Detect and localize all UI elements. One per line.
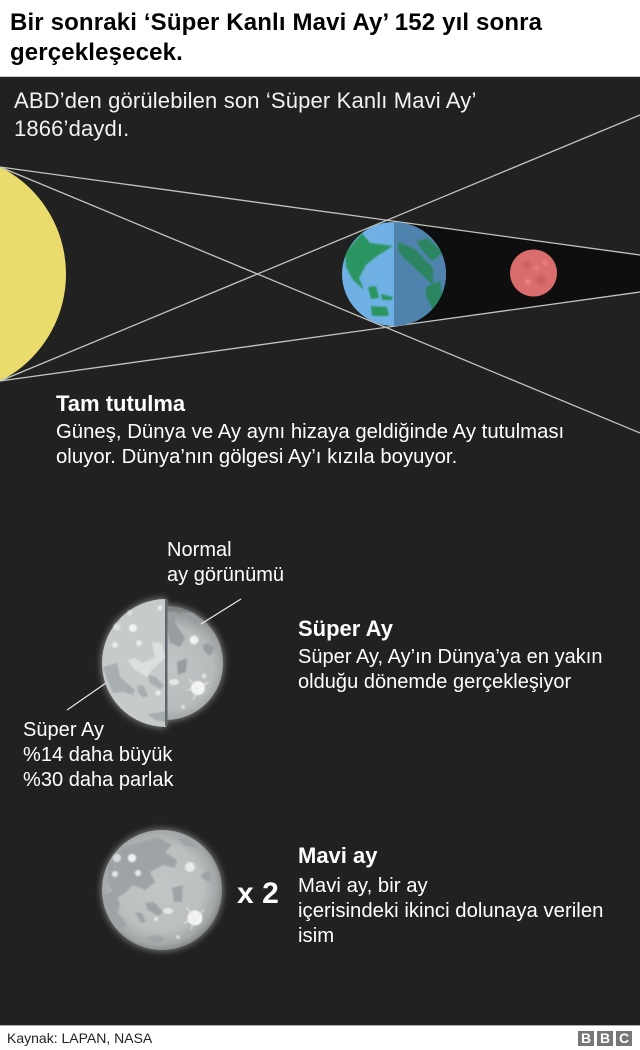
heading: Süper Ay: Süper Ay (298, 616, 393, 641)
text: blue moon description: içerisindeki ikinci dolunaya verilen (298, 900, 603, 922)
header: title: gerçekleşecek. (10, 39, 183, 66)
label: super moon: %30 daha parlak (23, 769, 174, 791)
subtitle (14, 88, 476, 141)
earth shadow (394, 222, 640, 326)
BBC logo: B (581, 1030, 591, 1046)
label: super moon (23, 719, 174, 791)
label: normal moon: Normal (167, 539, 232, 561)
BBC logo: B (600, 1030, 610, 1046)
label: normal moon: ay görünümü (167, 564, 284, 586)
earth (342, 220, 448, 328)
BBC logo (578, 1030, 632, 1046)
text: eclipse description: oluyor. Dünya’nın gölgesi Ay’ı kızıla boyuyor. (56, 446, 457, 468)
sun (0, 154, 66, 394)
subtitle: ABD’den görülebilen son ‘Süper Kanlı Mavi Ay’ (14, 88, 476, 113)
multiplier: x 2 (237, 877, 279, 910)
super moon half (102, 599, 166, 727)
text: super moon description: olduğu dönemde gerçekleşiyor (298, 671, 571, 693)
text: eclipse description: Güneş, Dünya ve Ay aynı hizaya geldiğinde Ay tutulması (56, 421, 564, 443)
text: super moon description: Süper Ay, Ay’ın Dünya’ya en yakın (298, 646, 603, 668)
footer: source (0, 1025, 640, 1050)
label: normal moon (167, 539, 284, 586)
text: super moon description (298, 646, 603, 693)
label: super moon: Süper Ay (23, 719, 104, 741)
pointer lines (67, 599, 241, 710)
text: blue moon description: isim (298, 925, 334, 947)
header: title (0, 0, 640, 77)
footer: source: Kaynak: LAPAN, NASA (7, 1030, 152, 1046)
header: title: Bir sonraki ‘Süper Kanlı Mavi Ay’ 152 yıl sonra (10, 9, 542, 36)
text: eclipse description (56, 421, 564, 468)
label: super moon: %14 daha büyük (23, 744, 172, 766)
heading: Mavi ay: Mavi ay (298, 843, 378, 868)
normal moon half (168, 606, 223, 720)
super moon comparison (101, 598, 230, 728)
text: blue moon description: Mavi ay, bir ay (298, 875, 428, 897)
light rays (0, 115, 640, 433)
text: blue moon description (298, 875, 603, 947)
heading: Tam tutulma: Tam tutulma (56, 391, 185, 416)
red moon (510, 250, 557, 296)
BBC logo: C (619, 1030, 629, 1046)
subtitle: 1866’daydı. (14, 116, 129, 141)
blue moon (101, 829, 223, 951)
